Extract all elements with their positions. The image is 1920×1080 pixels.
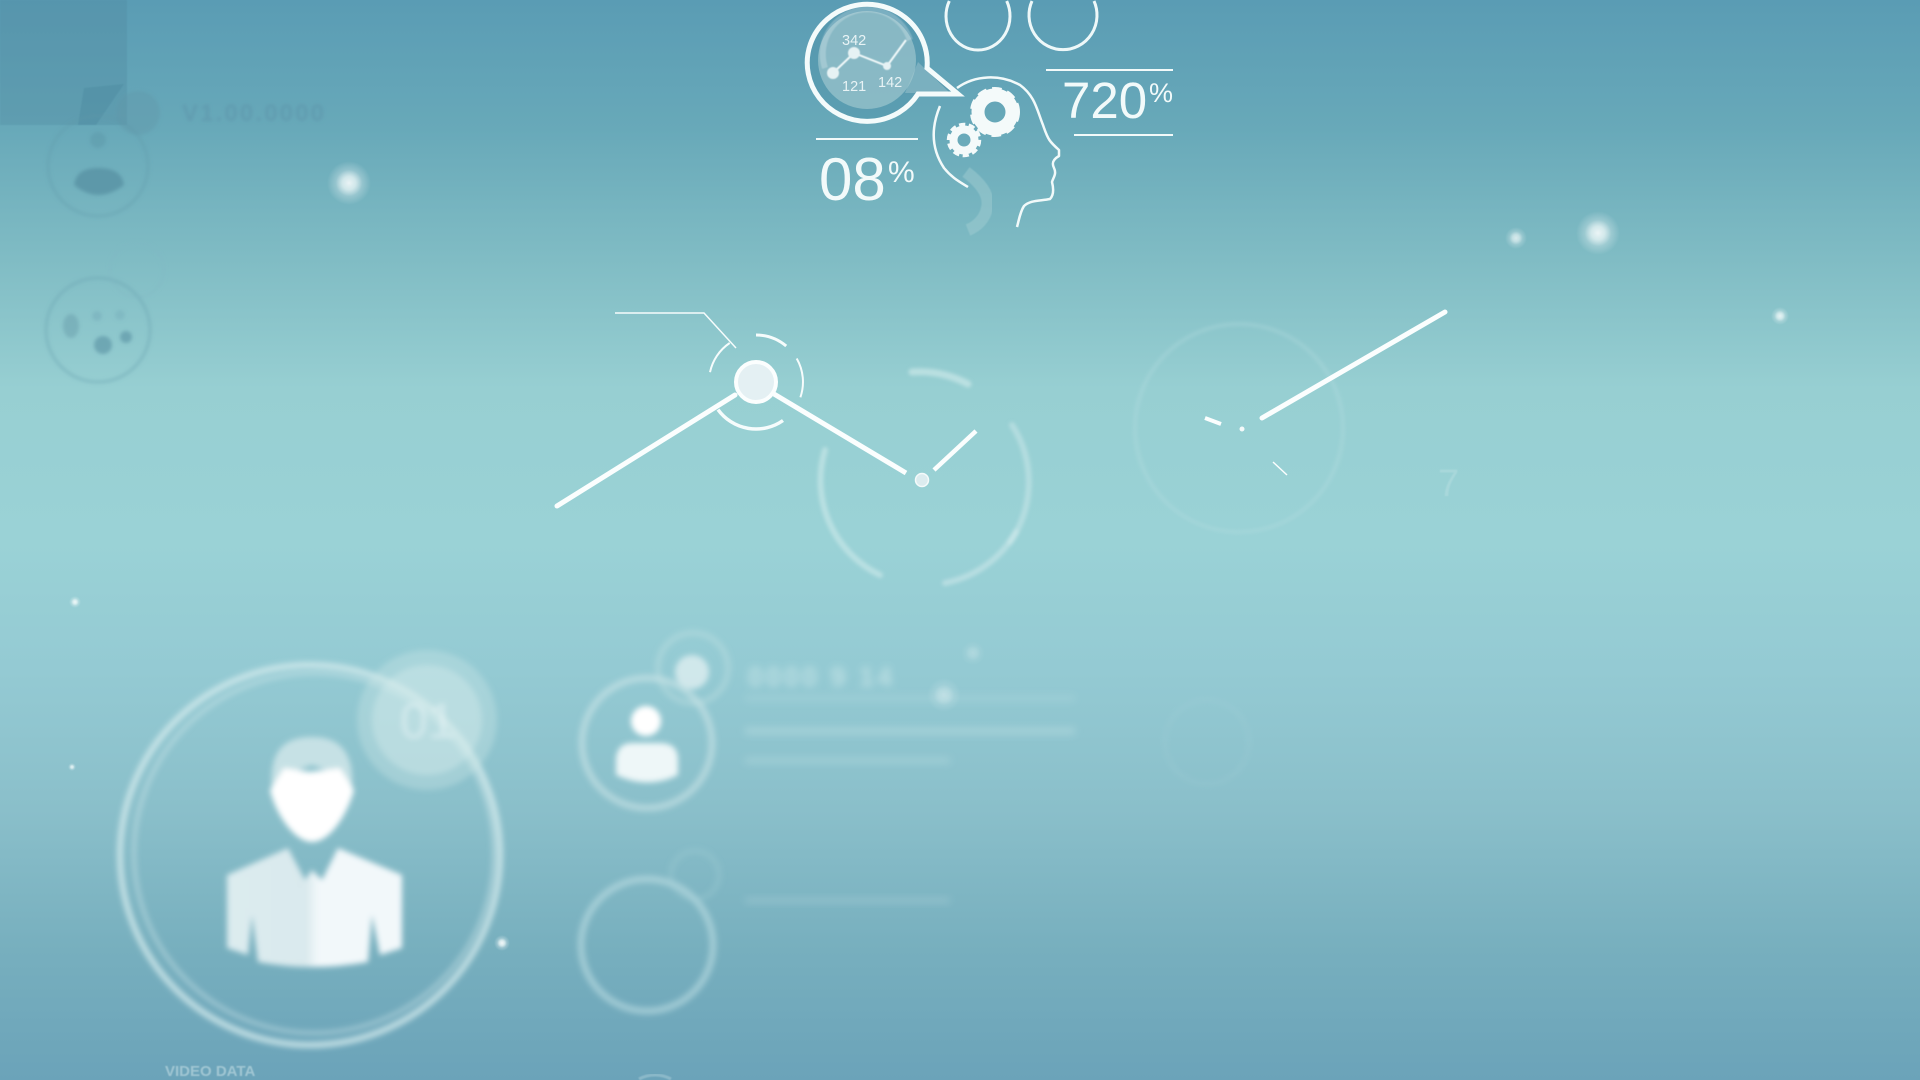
chart: central white line chart	[557, 312, 1459, 583]
chart value 342: 342	[842, 33, 866, 49]
badge ring	[671, 851, 719, 899]
line fragment left of faded node	[1205, 418, 1221, 424]
glow dot: upper right small	[1505, 227, 1527, 249]
text block: blurred entry one	[745, 662, 1075, 763]
stat: 08 percent	[816, 138, 918, 213]
glow dot: blurred lower	[927, 678, 961, 712]
head outline	[957, 77, 1059, 227]
glow dot: upper left	[327, 161, 371, 205]
stat: 720 percent: %	[1149, 78, 1173, 108]
icon: head profile with gears	[934, 77, 1059, 230]
head back arc	[934, 106, 968, 187]
bubble interior	[807, 4, 958, 121]
panel: faded top-left corner block	[0, 0, 127, 125]
inner ring	[134, 673, 494, 1033]
number badge: 01	[400, 693, 456, 749]
glow dot: upper right large	[1576, 211, 1620, 255]
small gear	[949, 125, 979, 155]
stat: 08 percent: 08	[819, 146, 886, 213]
icon: faint ring on right	[1165, 700, 1249, 784]
panel: blurred profile entry one	[582, 633, 728, 808]
large gear	[973, 90, 1017, 134]
line segment one	[557, 395, 735, 506]
glow dot: far right	[1771, 307, 1789, 325]
stat: 08 percent: %	[888, 156, 915, 189]
bubble outline	[807, 4, 958, 121]
person body	[227, 848, 402, 967]
ring	[581, 879, 713, 1011]
panel: faded top-left profile two	[46, 243, 164, 382]
bubble tail tint	[905, 62, 950, 93]
glow dot: left lower	[68, 763, 76, 771]
callout leader line	[615, 313, 736, 348]
line fragment right of faded node	[1273, 462, 1287, 475]
node: main data point	[710, 335, 803, 429]
icon: faint bottom ring	[639, 1075, 671, 1079]
person body	[616, 743, 678, 782]
number badge	[357, 650, 497, 790]
panel: blurred profile entry two	[581, 851, 719, 1011]
node: low point	[916, 474, 928, 486]
text block: blurred entry one: 0000 9 14	[748, 662, 892, 692]
ring	[582, 678, 712, 808]
bubble inner disc	[818, 11, 916, 109]
line segment four	[1262, 312, 1445, 418]
icon: top oval one	[946, 1, 1010, 50]
panel: top speech bubble mini line chart	[807, 4, 958, 121]
badge ring	[658, 633, 728, 703]
mini line chart	[827, 40, 906, 79]
stat: 720 percent	[1046, 69, 1173, 136]
node: faded point	[1240, 426, 1244, 432]
glow dot: blurred upper	[961, 641, 985, 665]
glow dot: left middle	[69, 596, 81, 608]
faint label mark: 7	[1438, 463, 1459, 505]
line segment two	[774, 394, 906, 473]
stat: 720 percent: 720	[1062, 72, 1147, 129]
icon: top oval two	[1029, 1, 1097, 50]
text block: blurred entry two	[745, 898, 950, 903]
glow dot: beside large ring	[494, 935, 510, 951]
outer ring	[120, 665, 500, 1045]
chart value 121: 121	[842, 79, 866, 95]
line segment three	[934, 431, 976, 470]
bubble highlight crescent	[823, 9, 910, 68]
panel: faded top-left profile one: V1.00.0000	[182, 100, 324, 127]
panel: faded top-left profile one	[48, 91, 324, 216]
chart value 142: 142	[878, 75, 902, 91]
head pale neck band	[966, 172, 988, 230]
person head	[631, 706, 661, 736]
panel: large blurred person profile	[120, 650, 500, 1045]
text block: faint bottom-left label: VIDEO DATA	[165, 1063, 255, 1080]
faint ring behind second segment	[1135, 324, 1343, 532]
person head	[270, 737, 354, 842]
badge dot	[675, 655, 709, 689]
faint ring behind low point	[821, 372, 1029, 583]
